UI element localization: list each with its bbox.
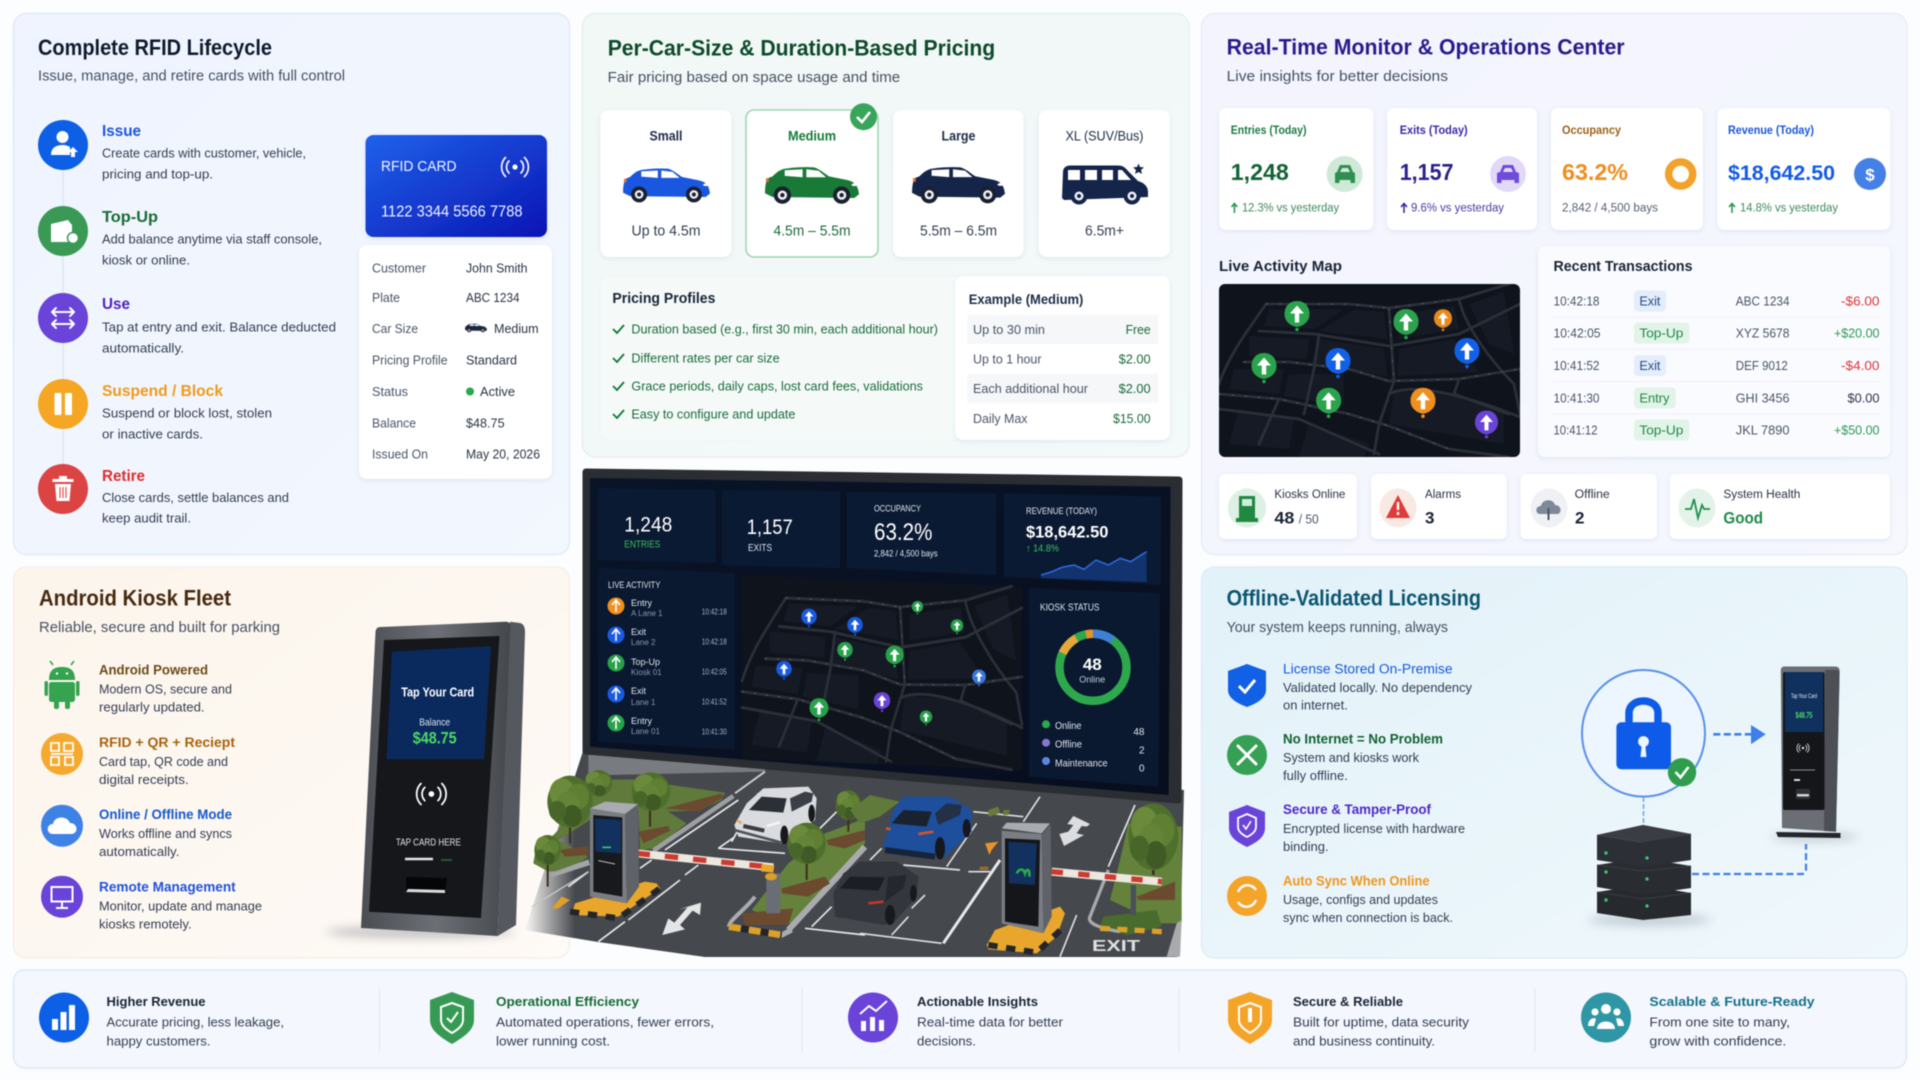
icon: van: [1062, 164, 1148, 204]
benefit: Secure and Reliable: and business continuity.: [1293, 1034, 1435, 1048]
stat card: Entries: 12.3% vs yesterday: [1242, 202, 1339, 214]
panel: Pricing: [582, 14, 1189, 457]
monitor: exits tile: [722, 490, 840, 568]
feature: No Internet: System and kiosks work: [1283, 750, 1419, 765]
feature: No Internet: No Internet = No Problem: [1283, 732, 1443, 746]
recent transactions table: 10:41:30: [1554, 390, 1600, 406]
monitor: occupancy tile: [847, 492, 996, 575]
step: Suspend / Block: Suspend or block lost, stolen: [102, 406, 272, 420]
car size card: Large: 5.5m – 6.5m: [920, 224, 997, 240]
heading: monitor: Real-Time Monitor & Operations Center: [1227, 34, 1625, 60]
recent transactions table: Top-Up: [1639, 422, 1683, 438]
step: Use: [38, 293, 336, 356]
benefit: Operational Efficiency: Automated operations, fewer errors,: [496, 1014, 714, 1030]
example medium pricing table: Each additional hour: [973, 381, 1089, 396]
card details table: Plate: [372, 290, 400, 305]
step: Suspend / Block: Suspend / Block: [102, 383, 223, 400]
stat card: Revenue: [1717, 108, 1890, 230]
car size card: Medium selected: 4.5m – 5.5m: [774, 224, 850, 240]
step: Top-Up: kiosk or online.: [102, 252, 190, 268]
stat card: Entries: Entries (Today): [1231, 125, 1307, 137]
feature: No Internet: [1227, 732, 1443, 783]
subheading: kiosk fleet: Reliable, secure and built for parking: [39, 620, 280, 636]
monitor: occupancy tile: OCCUPANCY: [874, 504, 922, 514]
panel: Complete RFID Lifecycle: [14, 14, 570, 554]
stat card: Exits: Exits (Today): [1400, 125, 1468, 137]
arrow: lane direction right: [1059, 816, 1090, 846]
recent transactions table: -$4.00: [1841, 358, 1880, 373]
benefit: Actionable Insights: Real-time data for better: [917, 1014, 1064, 1030]
icon: lock license: [1582, 670, 1705, 797]
car size card: Small: [600, 110, 732, 257]
server stack: [1588, 825, 1712, 926]
card details table: Issued On: [372, 446, 428, 462]
recent transactions table: Exit: [1639, 294, 1661, 308]
feature: Android Powered: Modern OS, secure and: [99, 682, 232, 696]
monitor: live activity list: Lane 1: [631, 698, 656, 707]
feature: Android Powered: Android Powered: [99, 662, 208, 678]
stat card: Revenue: $: [1865, 166, 1875, 184]
recent transactions table: 10:41:52: [1554, 358, 1600, 373]
connector: server to kiosk: [1692, 844, 1806, 874]
step: Issue: [38, 120, 306, 182]
monitor: kiosk status: Maintenance: [1055, 758, 1108, 770]
feature: License Stored: on internet.: [1283, 698, 1348, 712]
feature: Remote Management: Remote Management: [99, 880, 236, 894]
benefit: Higher Revenue: Higher Revenue: [106, 994, 206, 1009]
kiosk screen: Balance: [419, 716, 450, 728]
heading: kiosk fleet: Android Kiosk Fleet: [39, 586, 232, 610]
subheading: licensing: Your system keeps running, always: [1227, 620, 1448, 636]
feature: Auto Sync: Usage, configs and updates: [1283, 892, 1438, 907]
icon: selected check: [850, 103, 877, 130]
feature: License Stored: Validated locally. No dependency: [1283, 680, 1472, 695]
benefit: Scalable and Future-Ready: [1581, 992, 1815, 1048]
pricing profiles list: Different rates per car size: [631, 350, 780, 366]
tree: right: [1128, 803, 1178, 875]
monitor: live activity list: Lane 2: [631, 638, 656, 647]
monitor: map: [742, 575, 1022, 770]
pricing profiles list: Grace periods, daily caps, lost card fees, validations: [631, 378, 923, 394]
feature: Remote Management: kiosks remotely.: [99, 916, 192, 932]
monitor: live activity list: 10:42:05: [702, 668, 727, 676]
step: Top-Up: Add balance anytime via staff console,: [102, 232, 322, 246]
car size card: Large: Large: [942, 128, 976, 144]
recent transactions table: DEF 9012: [1736, 358, 1788, 373]
monitor: revenue tile: $18,642.50: [1026, 524, 1108, 542]
parking lot scene: left half: [532, 750, 865, 942]
car size card: Medium selected: Medium: [788, 128, 836, 144]
feature: Auto Sync: [1227, 874, 1453, 925]
card details table: Pricing Profile: [372, 352, 448, 368]
step: Issue: Issue: [102, 123, 141, 140]
monitor: kiosk status: [1029, 588, 1160, 787]
monitor: live activity list: Entry: [631, 598, 653, 608]
stat card: Exits: 9.6% vs yesterday: [1411, 202, 1504, 214]
card details table: $48.75: [466, 416, 505, 430]
benefit: Scalable and Future-Ready: grow with confidence.: [1649, 1034, 1786, 1048]
panel: Offline-Validated Licensing: [1202, 567, 1907, 958]
feature: Secure and Tamper-Proof: Secure & Tamper-Proof: [1283, 802, 1431, 817]
card details table: Balance: [372, 416, 416, 430]
kiosk illustration: TAP CARD HERE: [396, 838, 461, 848]
monitor: exits tile: 1,157: [747, 516, 793, 539]
card details table: John Smith: [466, 260, 528, 276]
feature: Auto Sync: sync when connection is back.: [1283, 910, 1453, 925]
car size card: XL: XL (SUV/Bus): [1066, 128, 1144, 144]
step: Suspend / Block: [38, 379, 272, 442]
example medium pricing table: Daily Max: [973, 411, 1028, 426]
parking lot ground: [525, 745, 1184, 957]
stat card: Entries: 1,248: [1231, 159, 1289, 185]
panel: benefits strip: [14, 970, 1906, 1068]
card details table: Status: [372, 384, 408, 399]
donut chart: [1048, 623, 1138, 712]
subheading: monitor: Live insights for better decisions: [1227, 69, 1448, 85]
monitor: live activity list: Entry: [631, 716, 653, 726]
recent transactions table: $0.00: [1848, 390, 1880, 406]
feature: License Stored: [1228, 662, 1472, 712]
connector: lock to server: [1642, 797, 1644, 824]
benefit: Higher Revenue: happy customers.: [106, 1034, 210, 1048]
recent transactions table: GHI 3456: [1736, 390, 1790, 406]
status card: Kiosks Online: 48: [1274, 508, 1294, 528]
panel: Android Kiosk Fleet: [14, 567, 570, 958]
kiosk illustration: [325, 622, 525, 938]
step: Suspend / Block: or inactive cards.: [102, 426, 203, 442]
recent transactions table: 10:42:18: [1554, 294, 1600, 308]
step: Use: automatically.: [102, 340, 184, 356]
stat card: Revenue: Revenue (Today): [1728, 125, 1814, 137]
step: Top-Up: [38, 206, 322, 268]
status card: Kiosks Online: / 50: [1299, 512, 1319, 526]
feature: Online / Offline Mode: [41, 805, 232, 859]
subheading: lifecycle: Issue, manage, and retire cards with full control: [38, 68, 345, 84]
stat card: Occupancy: 2,842 / 4,500 bays: [1562, 202, 1658, 214]
feature: Secure and Tamper-Proof: binding.: [1283, 839, 1329, 854]
kiosk screen: $48.75: [413, 730, 457, 748]
stat card: Revenue: 14.8% vs yesterday: [1740, 202, 1838, 214]
monitor: entries tile: 1,248: [624, 514, 672, 536]
pricing profiles list: Pricing Profiles: [612, 291, 715, 307]
car size card: Small: Small: [650, 128, 682, 144]
card details table: Medium: [494, 321, 539, 336]
central illustration: monitor and parking lot: [525, 472, 1184, 957]
recent transactions table: Top-Up: [1639, 326, 1683, 340]
stat card: Occupancy: [1551, 108, 1703, 230]
monitor: live activity list: [598, 568, 735, 750]
recent transactions table: Recent Transactions: [1554, 259, 1692, 275]
stat card: Entries: [1219, 108, 1374, 230]
benefit: Operational Efficiency: [430, 992, 714, 1048]
card details table: Car Size: [372, 321, 418, 336]
heading: pricing: Per-Car-Size & Duration-Based Pricing: [608, 36, 995, 60]
example medium pricing table: Up to 30 min: [973, 322, 1045, 337]
barrier gate: left: [570, 802, 777, 918]
status card: Alarms: 3: [1425, 508, 1434, 528]
monitor: exits tile: EXITS: [748, 542, 772, 554]
status card: Offline: 2: [1575, 508, 1584, 528]
status card: System Health: Good: [1723, 508, 1763, 528]
recent transactions table: +$20.00: [1834, 326, 1880, 340]
card details table: Customer: [372, 260, 427, 276]
example medium pricing table: Up to 1 hour: [973, 352, 1042, 366]
step: Retire: Close cards, settle balances and: [102, 490, 289, 505]
feature: Remote Management: Monitor, update and manage: [99, 898, 262, 914]
live activity map: [1219, 284, 1520, 457]
feature: Android Powered: [44, 661, 232, 714]
monitor: live activity list: Lane 01: [631, 727, 660, 736]
heading: lifecycle: Complete RFID Lifecycle: [38, 35, 272, 60]
step: Retire: keep audit trail.: [102, 510, 191, 526]
monitor: kiosk status: Online: [1055, 721, 1082, 732]
monitor: live activity list: 10:42:18: [702, 638, 727, 646]
benefit: Actionable Insights: Actionable Insights: [917, 994, 1038, 1009]
monitor: revenue tile: ↑ 14.8%: [1026, 544, 1059, 554]
example medium pricing table: $15.00: [1113, 411, 1151, 426]
example medium pricing table: [955, 276, 1170, 440]
feature: Android Powered: regularly updated.: [99, 700, 205, 714]
car size card: XL: 6.5m+: [1085, 224, 1124, 240]
benefit: Secure and Reliable: Secure & Reliable: [1293, 994, 1403, 1009]
kiosk screen: Tap Your Card: [401, 684, 474, 700]
stat card: Occupancy: Occupancy: [1562, 125, 1622, 137]
car size card: Medium selected: [746, 103, 878, 257]
benefit: Operational Efficiency: lower running cost.: [496, 1034, 610, 1048]
monitor: occupancy tile: 2,842 / 4,500 bays: [874, 548, 938, 560]
monitor: live activity list: Exit: [631, 686, 647, 696]
feature: License Stored: License Stored On-Premise: [1283, 662, 1452, 676]
monitor: live activity list: 10:42:18: [702, 608, 727, 616]
barrier gate: right: [987, 823, 1162, 953]
benefit: Scalable and Future-Ready: Scalable & Future-Ready: [1649, 994, 1815, 1009]
status card: Offline: [1520, 474, 1657, 539]
feature: Secure and Tamper-Proof: [1229, 802, 1465, 854]
example medium pricing table: Example (Medium): [969, 292, 1083, 307]
benefit: Secure and Reliable: [1228, 992, 1470, 1048]
feature: Online / Offline Mode: Online / Offline Mode: [99, 807, 232, 822]
monitor: entries tile: [598, 488, 715, 563]
monitor: kiosk status: KIOSK STATUS: [1040, 602, 1100, 614]
monitor: kiosk status: Offline: [1055, 740, 1082, 750]
status card: System Health: [1670, 474, 1890, 539]
arrow: lane direction left: [662, 903, 701, 935]
recent transactions table: [1538, 246, 1890, 457]
feature: Auto Sync: Auto Sync When Online: [1283, 874, 1430, 888]
benefit: Actionable Insights: decisions.: [917, 1034, 976, 1048]
RFID card: 1122 3344 5566 7788: [381, 204, 522, 220]
monitor: revenue tile: [1004, 493, 1161, 585]
monitor: kiosk status: 48: [1133, 727, 1145, 738]
monitor: kiosk status: 48: [1083, 655, 1102, 674]
benefit: Actionable Insights: [848, 992, 1064, 1048]
car: dark: [833, 862, 918, 925]
recent transactions table: -$6.00: [1841, 294, 1880, 308]
feature: Online / Offline Mode: automatically.: [99, 844, 179, 859]
monitor frame: [586, 472, 1179, 800]
monitor screen: [590, 478, 1171, 795]
subheading: pricing: Fair pricing based on space usage and time: [608, 70, 900, 86]
example medium pricing table: $2.00: [1119, 352, 1151, 366]
step: Issue: Create cards with customer, vehicle,: [102, 146, 306, 160]
kiosk screen: [387, 646, 491, 759]
status card: Alarms: [1371, 474, 1507, 539]
pricing profiles list: [600, 276, 970, 440]
recent transactions table: JKL 7890: [1736, 422, 1790, 438]
car size card: Large: [893, 110, 1024, 257]
status card: System Health: System Health: [1723, 489, 1800, 501]
RFID card: [366, 135, 547, 237]
feature: Secure and Tamper-Proof: Encrypted license with hardware: [1283, 821, 1465, 836]
monitor: live activity list: Top-Up: [631, 657, 660, 667]
stat card: Occupancy: 63.2%: [1562, 159, 1628, 185]
card details table: May 20, 2026: [466, 446, 540, 462]
arrow: lock to kiosk: [1713, 725, 1766, 744]
monitor: revenue tile: REVENUE (TODAY): [1026, 506, 1097, 517]
feature: Remote Management: [41, 876, 262, 932]
recent transactions table: XYZ 5678: [1736, 326, 1790, 340]
recent transactions table: 10:41:12: [1554, 422, 1598, 438]
recent transactions table: 10:42:05: [1554, 326, 1600, 340]
benefit: Higher Revenue: Accurate pricing, less leakage,: [106, 1014, 284, 1030]
pricing profiles list: Duration based (e.g., first 30 min, each additional hour): [631, 322, 938, 336]
benefit: Higher Revenue: [39, 992, 284, 1048]
benefit: Scalable and Future-Ready: From one site to many,: [1649, 1014, 1790, 1030]
monitor: live activity list: 10:41:52: [702, 698, 727, 706]
monitor: live activity list: A Lane 1: [631, 609, 663, 618]
status card: Alarms: Alarms: [1425, 489, 1461, 501]
stat card: Exits: [1387, 108, 1537, 230]
recent transactions table: Exit: [1639, 358, 1661, 373]
monitor: entries tile: ENTRIES: [624, 538, 660, 550]
car: blue: [883, 797, 972, 860]
monitor: occupancy tile: 63.2%: [874, 519, 932, 546]
example medium pricing table: Free: [1126, 322, 1151, 337]
car: white: [734, 787, 817, 844]
card details table: Active: [480, 384, 515, 399]
step: Use: Use: [102, 296, 130, 313]
recent transactions table: ABC 1234: [1736, 294, 1790, 308]
small kiosk illustration: [1771, 666, 1859, 841]
feature: No Internet: fully offline.: [1283, 768, 1348, 783]
monitor: kiosk status: 0: [1139, 764, 1145, 774]
feature: Online / Offline Mode: Works offline and syncs: [99, 826, 232, 841]
step: Top-Up: Top-Up: [102, 209, 158, 226]
parking lot scene: right half: [833, 795, 1182, 957]
status card: Offline: Offline: [1575, 489, 1610, 501]
text: EXIT road marking: EXIT: [1092, 938, 1140, 955]
benefit: Secure and Reliable: Built for uptime, data security: [1293, 1014, 1470, 1030]
small kiosk illustration: $48.75: [1796, 711, 1813, 720]
monitor: live activity list: Kiosk 01: [631, 668, 662, 677]
monitor: live activity list: LIVE ACTIVITY: [608, 580, 661, 591]
trees: left: [534, 770, 861, 887]
monitor: live activity list: Exit: [631, 627, 647, 637]
car size card: Small: Up to 4.5m: [632, 224, 700, 240]
feature: RFID + QR + Reciept: Card tap, QR code and: [99, 754, 228, 769]
step: Issue: pricing and top-up.: [102, 166, 213, 182]
RFID card: RFID CARD: [381, 158, 457, 175]
example medium pricing table: $2.00: [1119, 381, 1151, 396]
step: Use: Tap at entry and exit. Balance deducted: [102, 320, 336, 334]
monitor: live activity list: 10:41:30: [702, 728, 727, 736]
heading: live activity map: Live Activity Map: [1219, 259, 1342, 275]
card details table: ABC 1234: [466, 290, 520, 305]
status card: Kiosks Online: Kiosks Online: [1274, 489, 1345, 501]
stat card: Revenue: $18,642.50: [1728, 161, 1835, 185]
monitor: kiosk status: Online: [1079, 674, 1105, 684]
feature: RFID + QR + Reciept: digital receipts.: [99, 772, 189, 787]
feature: RFID + QR + Reciept: RFID + QR + Reciept: [99, 735, 236, 750]
heading: licensing: Offline-Validated Licensing: [1227, 586, 1481, 610]
car size card: XL: [1039, 110, 1170, 257]
recent transactions table: Entry: [1639, 390, 1670, 406]
step: Retire: [38, 464, 289, 526]
recent transactions table: +$50.00: [1834, 422, 1880, 438]
stat card: Exits: 1,157: [1400, 159, 1454, 185]
card details table: [359, 245, 552, 479]
panel: Real-Time Monitor: [1202, 14, 1907, 554]
status card: Kiosks Online: [1219, 474, 1357, 539]
monitor: kiosk status: 2: [1139, 746, 1145, 756]
pricing profiles list: Easy to configure and update: [631, 406, 795, 422]
feature: RFID + QR + Reciept: [41, 733, 236, 787]
benefit: Operational Efficiency: Operational Efficiency: [496, 994, 640, 1009]
step: Retire: Retire: [102, 468, 145, 485]
card details table: Standard: [466, 352, 517, 368]
small kiosk illustration: Tap Your Card: [1791, 693, 1817, 700]
